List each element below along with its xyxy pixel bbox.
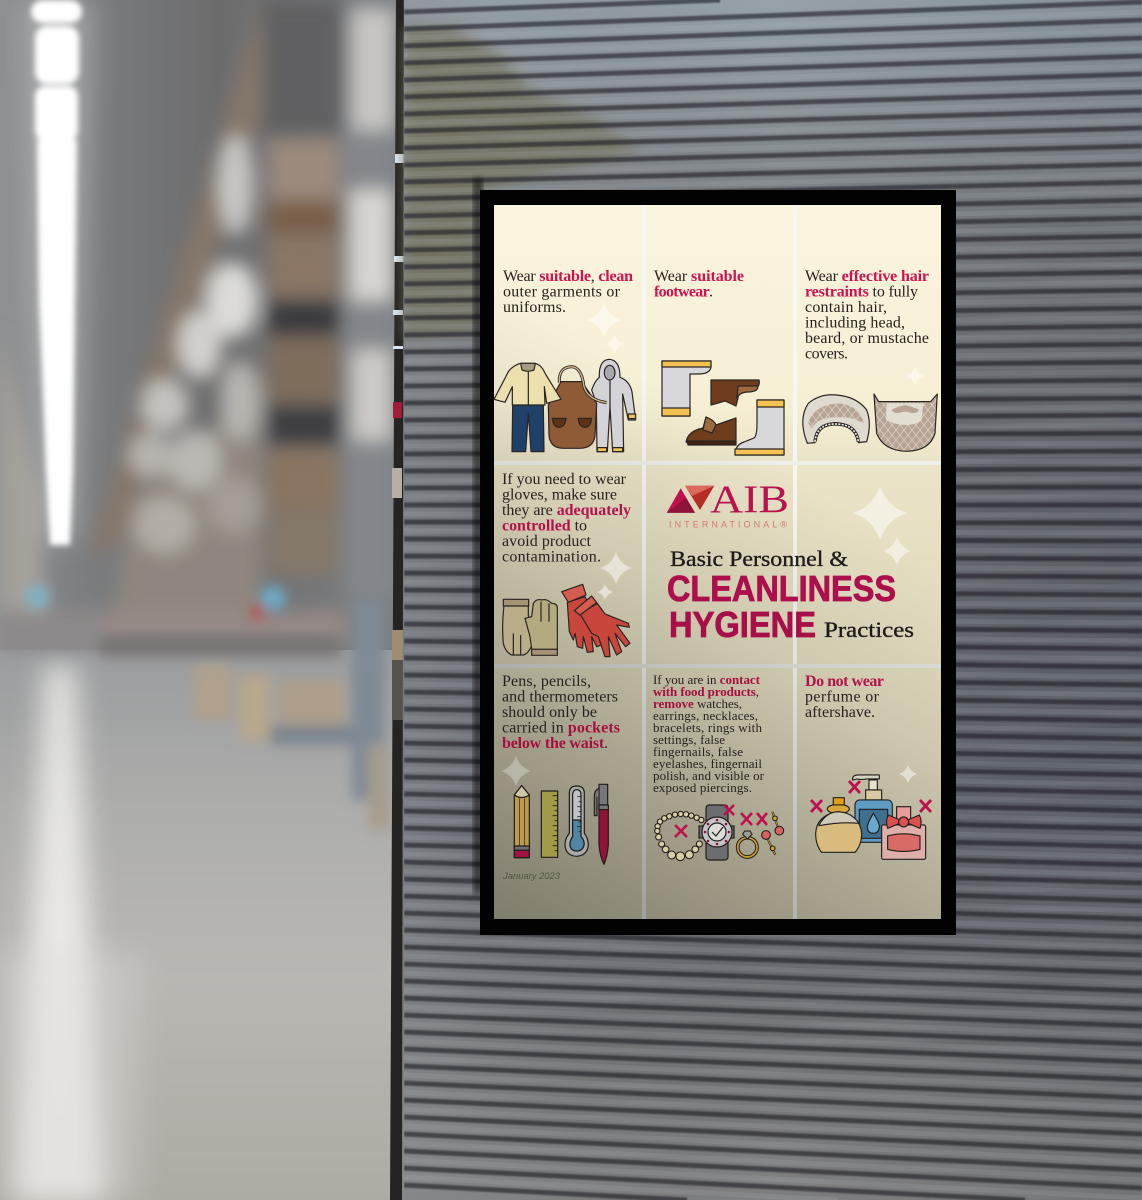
text: jewelry: If you are in contact [653,672,761,687]
panel: jewelry [653,672,784,861]
date: January 2023 [502,871,561,882]
panel: gloves [502,471,631,657]
background: dark wall edge [390,0,406,1200]
text: gloves: If you need to wear [502,471,627,488]
text: outer garments [503,268,633,316]
text: fragrance: Do not wear [805,673,884,690]
text: pockets: and thermometers [502,688,618,706]
logo mark [667,486,714,513]
text: gloves [502,471,631,566]
text: footwear: Wear suitable [654,268,744,285]
text: jewelry [653,672,765,795]
slat grooves [404,0,1142,1200]
icon: watch [699,805,734,860]
noise streaks [403,0,1142,1200]
text: pockets: carried in pockets [502,720,620,736]
text: fragrance: perfume or [805,688,880,706]
background: corrugated metal wall [402,0,1142,1200]
decorative sparkles [501,303,924,786]
poster [494,205,941,919]
icon: beige and red gloves [503,584,630,657]
text: jewelry: with food products, [653,684,759,699]
text: footwear [654,268,744,300]
heading: title: Practices [824,617,914,642]
text: hair restraints [805,268,929,362]
shelf bases over floor [0,585,390,830]
text: gloves: avoid product [502,533,592,550]
olive weathered patch [404,28,640,340]
text: jewelry: settings, false [653,732,725,747]
text: pockets: below the waist. [502,735,608,752]
text: gloves: controlled to [502,518,587,534]
text: jewelry: bracelets, rings with [653,720,762,735]
text: footwear: footwear. [654,284,713,300]
panel: outer garments [494,268,636,452]
panel: pockets [502,673,620,882]
text: outer garments: Wear suitable, clean [503,268,633,285]
icon: x marks [811,781,931,812]
text: fragrance: aftershave. [805,704,875,721]
text: hair restraints: including head, [805,314,905,332]
icon: pencil, ruler, thermometer and pen [514,784,608,864]
text: pockets: Pens, pencils, [502,673,591,690]
icon: hairnet and beard net [803,394,937,451]
text: pockets: should only be [502,704,597,721]
text: fragrance [805,673,884,721]
text: jewelry: earrings, necklaces, [653,708,758,723]
text: hair restraints: restraints to fully [805,284,918,300]
text: hair restraints: contain hair, [805,299,887,316]
poster shadow [473,178,483,894]
text: jewelry: exposed piercings. [653,780,752,795]
text: hair restraints: beard, or mustache [805,330,929,347]
logo subtitle: INTERNATIONAL® [669,520,787,530]
floor [0,650,398,1200]
panel: hair restraints [803,268,937,451]
text: jewelry: fingernails, false [653,744,743,759]
panel: title [667,478,914,645]
icon: necklace [655,811,704,861]
poster frame [480,190,956,935]
ceiling light strip [31,0,82,545]
logo: AIB International [667,478,789,530]
icon: x marks [675,805,767,837]
text: outer garments: uniforms. [503,299,566,316]
panel: footwear [654,268,784,455]
warehouse shelving [0,0,397,650]
heading: title: Basic Personnel & [670,546,848,571]
icon: boots [662,361,784,455]
panel: fragrance [805,673,931,859]
floor light reflection [15,665,105,1200]
text: jewelry: polish, and visible or [653,768,765,783]
text: jewelry: eyelashes, fingernail [653,756,762,771]
text: hair restraints: Wear effective hair [805,268,929,285]
text: outer garments: outer garments or [503,284,621,300]
text: jewelry: remove watches, [653,696,742,711]
text: gloves: gloves, make sure [502,486,617,504]
heading: title: CLEANLINESS [667,568,896,609]
icon: perfume bottles [816,775,926,859]
text: hair restraints: covers. [805,346,848,362]
heading: title: HYGIENE [669,604,816,645]
text: pockets [502,673,620,752]
icon: ring and earrings [738,812,784,857]
heading: title [667,546,914,645]
text: gloves: contamination. [502,548,601,566]
text: gloves: they are adequately [502,502,631,519]
slat highlights [404,12,1142,1200]
icon: coverall, apron, jacket and jeans [494,359,636,452]
logo wordmark: AIB [710,478,789,521]
background: blurred warehouse aisle [0,0,398,1200]
ceiling light glow [25,0,92,540]
